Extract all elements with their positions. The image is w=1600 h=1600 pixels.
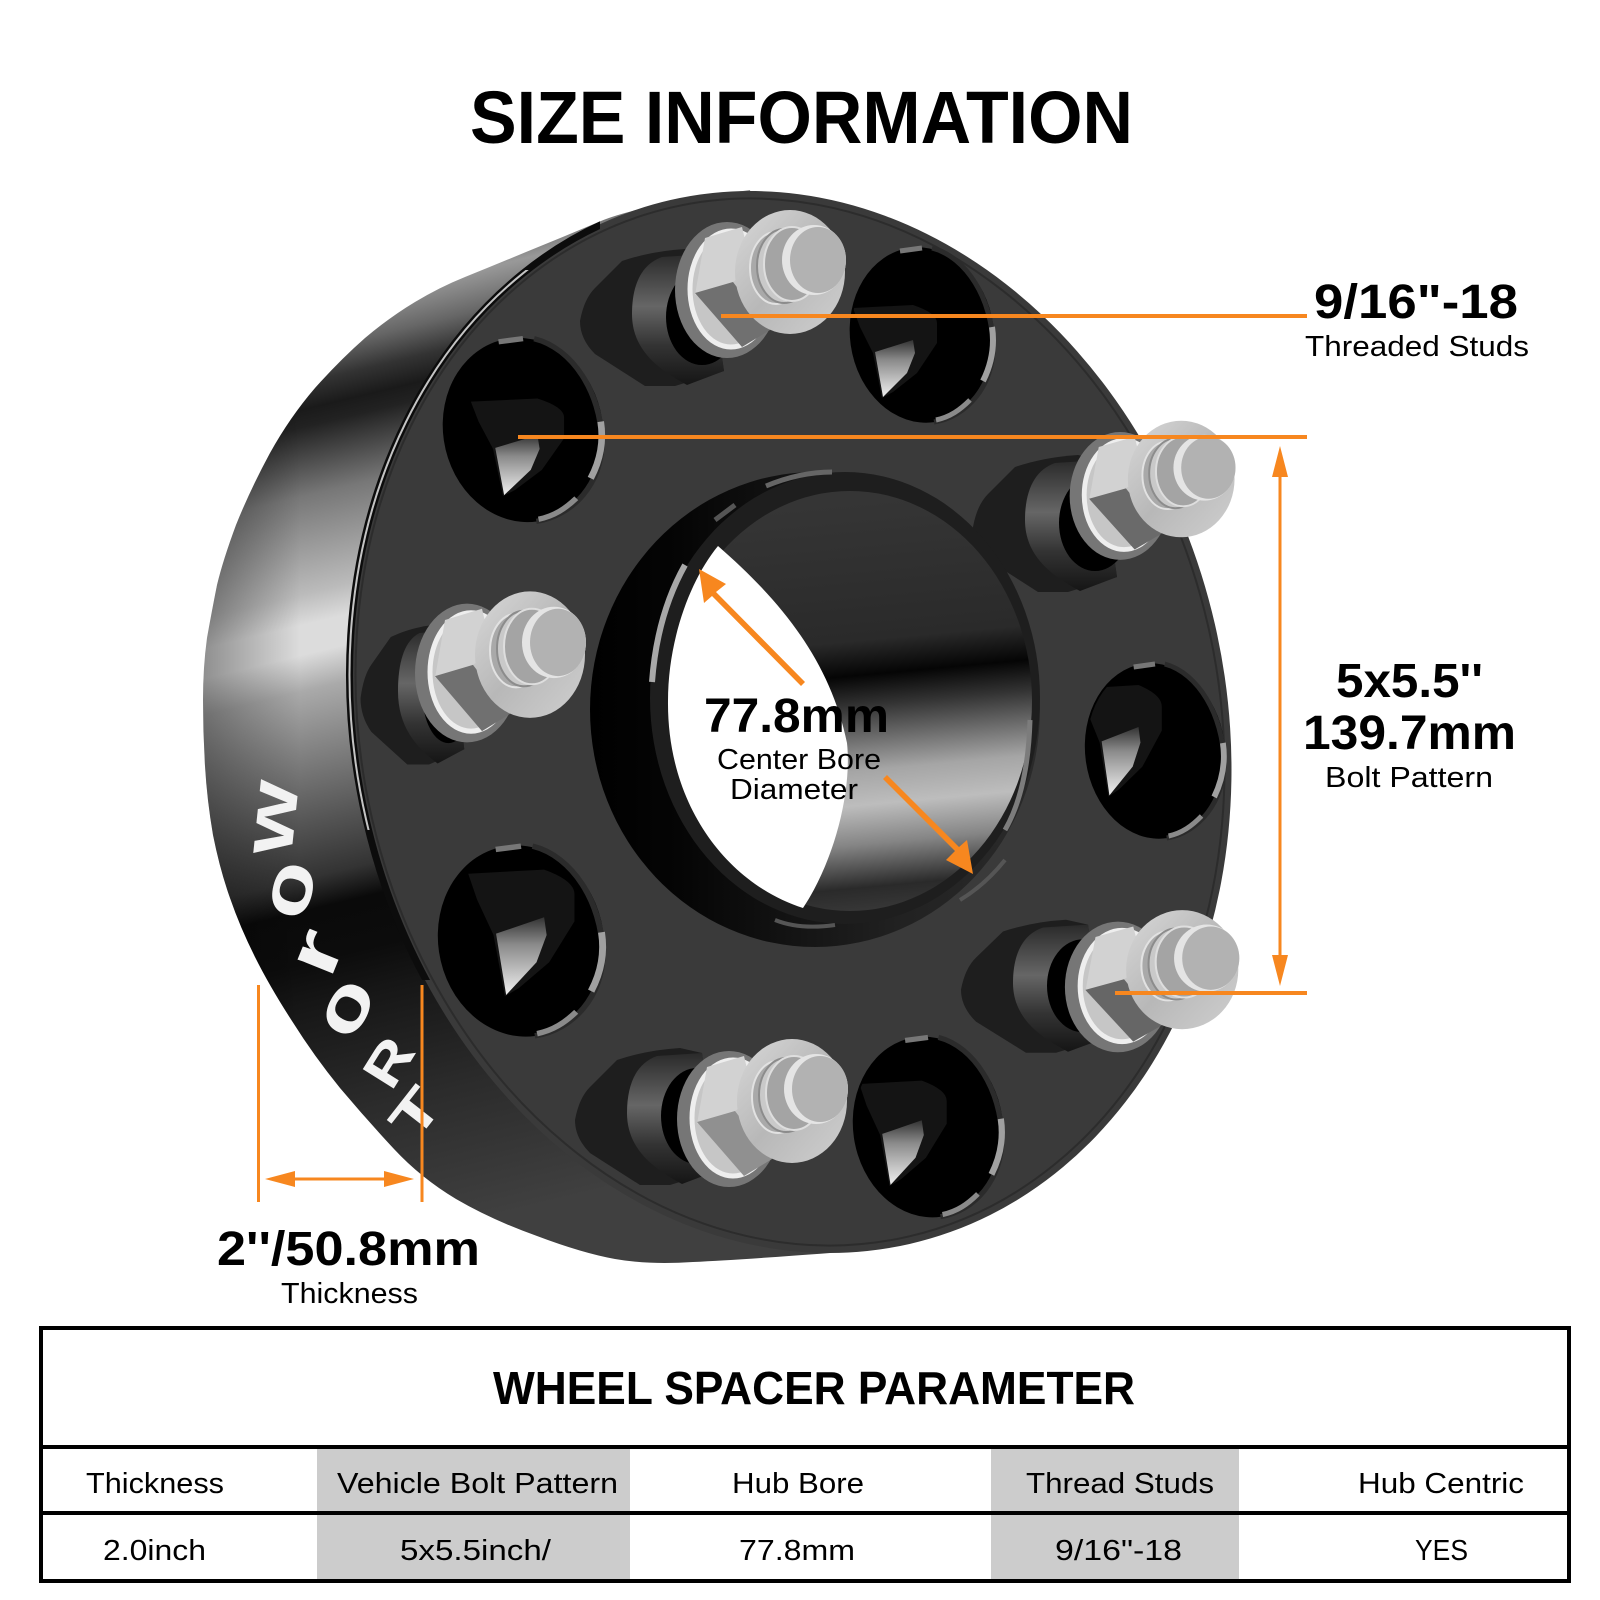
vertical double arrow [1272,446,1288,986]
threaded studs [361,210,1239,1187]
logo on band [226,776,454,1150]
caption: Thickness [281,1278,418,1310]
header row [86,1468,1524,1500]
hole: lower left [438,844,606,1038]
hole: upper left [442,336,606,524]
value row: 2.0inch [103,1535,206,1567]
upper arrow [699,569,805,686]
logo on band: T [378,1076,454,1150]
table frame [41,1328,1569,1581]
bottom leader line [1115,991,1307,995]
gray column: thread studs [991,1449,1239,1581]
value row: 5x5.5inch/ [400,1535,552,1567]
caption line 1: Center Bore [717,744,881,776]
right extension line [420,985,424,1202]
value millimetres: 139.7mm [1303,707,1516,760]
value: 9/16"-18 [1314,276,1518,329]
header row: Thickness [86,1468,224,1500]
value row: 77.8mm [739,1535,855,1567]
value row [103,1535,1468,1567]
value row: 9/16"-18 [1055,1535,1182,1567]
header row: Hub Bore [732,1468,864,1500]
value inches: 5x5.5'' [1336,655,1483,708]
title: SIZE INFORMATION [470,76,1133,159]
header row: Hub Centric [1358,1468,1524,1500]
bolt holes [425,238,1236,1227]
logo on band: o [240,851,333,926]
caption: Threaded Studs [1305,331,1529,363]
spacer outer band [203,190,850,1263]
spacer front face [346,191,1232,1253]
logo on band: o [294,962,392,1051]
wheel spacer illustration [203,190,1240,1263]
dimension: thickness [217,985,480,1310]
table heading: WHEEL SPACER PARAMETER [493,1362,1135,1414]
lower arrow [883,775,973,874]
stud: bottom [575,1039,848,1187]
logo on band: r [270,917,360,986]
hole: top right [850,246,996,424]
stud: top [580,210,846,386]
stud: left [361,591,586,765]
gray column: vehicle bolt pattern [317,1449,630,1581]
header row: Vehicle Bolt Pattern [337,1468,618,1500]
leader line [721,314,1307,318]
center bore [590,472,1040,947]
top leader line [518,435,1307,439]
logo on band: R [351,1026,426,1098]
dimension: center bore [699,569,973,874]
stud: upper right [973,421,1236,592]
parameter table [41,1328,1569,1581]
value row: YES [1415,1535,1468,1567]
header row: Thread Studs [1026,1468,1214,1500]
hole: bottom right [852,1035,1005,1219]
logo on band: w [226,776,314,859]
dimension: threaded studs [721,276,1529,363]
value: 2''/50.8mm [217,1223,480,1276]
stud: lower right [961,910,1239,1053]
dimension: bolt pattern [518,435,1516,995]
value: 77.8mm [704,690,889,743]
caption line 2: Diameter [730,774,858,806]
hole: right [1084,662,1227,840]
left extension line [257,985,260,1202]
caption: Bolt Pattern [1325,762,1493,794]
horizontal double arrow [265,1171,414,1187]
